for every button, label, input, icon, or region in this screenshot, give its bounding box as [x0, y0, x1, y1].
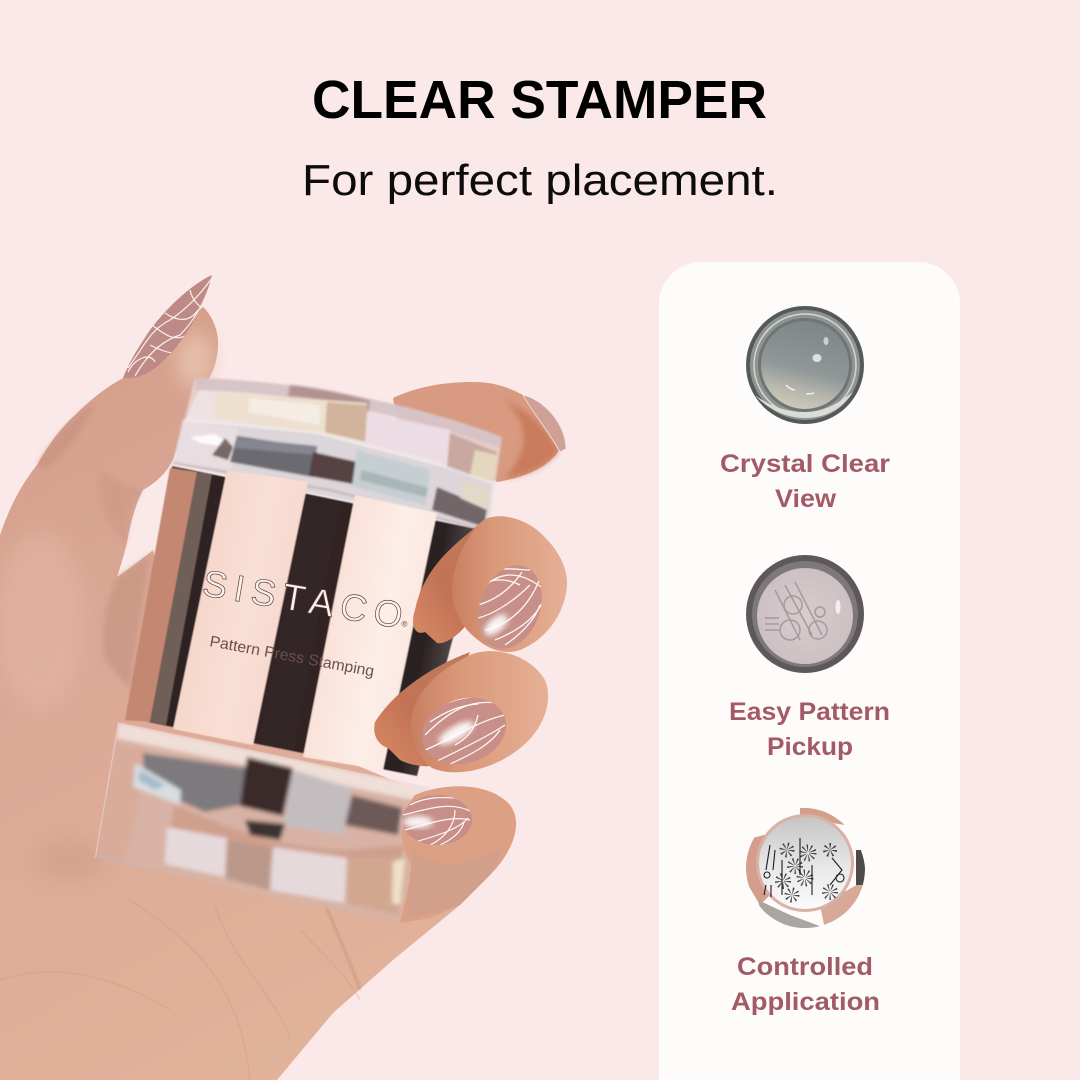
index nail	[523, 395, 566, 452]
label: crystal clear view: Crystal Clear	[720, 450, 890, 478]
label: controlled application: Application	[731, 988, 880, 1016]
pinky finger	[400, 786, 516, 923]
ring nail with stamped pattern	[422, 698, 506, 764]
rose gold body	[125, 466, 481, 776]
label: controlled application	[731, 953, 880, 1016]
icon: crystal clear stamper top	[746, 306, 864, 424]
panel: features card	[659, 262, 960, 1080]
label: crystal clear view	[720, 450, 890, 513]
lid ring	[173, 420, 492, 531]
hand: palm and thumb	[0, 307, 460, 1080]
brand name SISTACO: SISTACO	[200, 562, 406, 636]
pinky nail with stamped pattern	[402, 795, 472, 845]
label: controlled application: Controlled	[737, 953, 873, 981]
middle finger	[452, 516, 567, 658]
thumb nail with stamped pattern	[123, 275, 212, 378]
label: easy pattern pickup: Easy Pattern	[729, 698, 890, 726]
ring finger	[411, 651, 548, 775]
fingertip reflections on stamper	[374, 525, 490, 766]
middle nail with stamped pattern	[478, 565, 542, 649]
icon: easy pattern pickup stamper top	[746, 555, 864, 673]
label: easy pattern pickup	[729, 698, 890, 761]
clear top lid	[173, 378, 502, 532]
label: crystal clear view: View	[775, 485, 837, 513]
product line text: Pattern Press Stamping	[208, 633, 376, 680]
registered mark: ®	[401, 619, 408, 629]
stamper	[95, 378, 502, 924]
subtitle: For perfect placement.	[302, 156, 778, 205]
hand holding the clear stamper	[0, 275, 567, 1080]
title: CLEAR STAMPER	[312, 70, 767, 130]
index finger behind stamper	[393, 382, 566, 482]
label: easy pattern pickup: Pickup	[767, 733, 853, 761]
clear bottom base	[95, 720, 430, 924]
icon: stamper head with floral pattern	[745, 806, 867, 930]
